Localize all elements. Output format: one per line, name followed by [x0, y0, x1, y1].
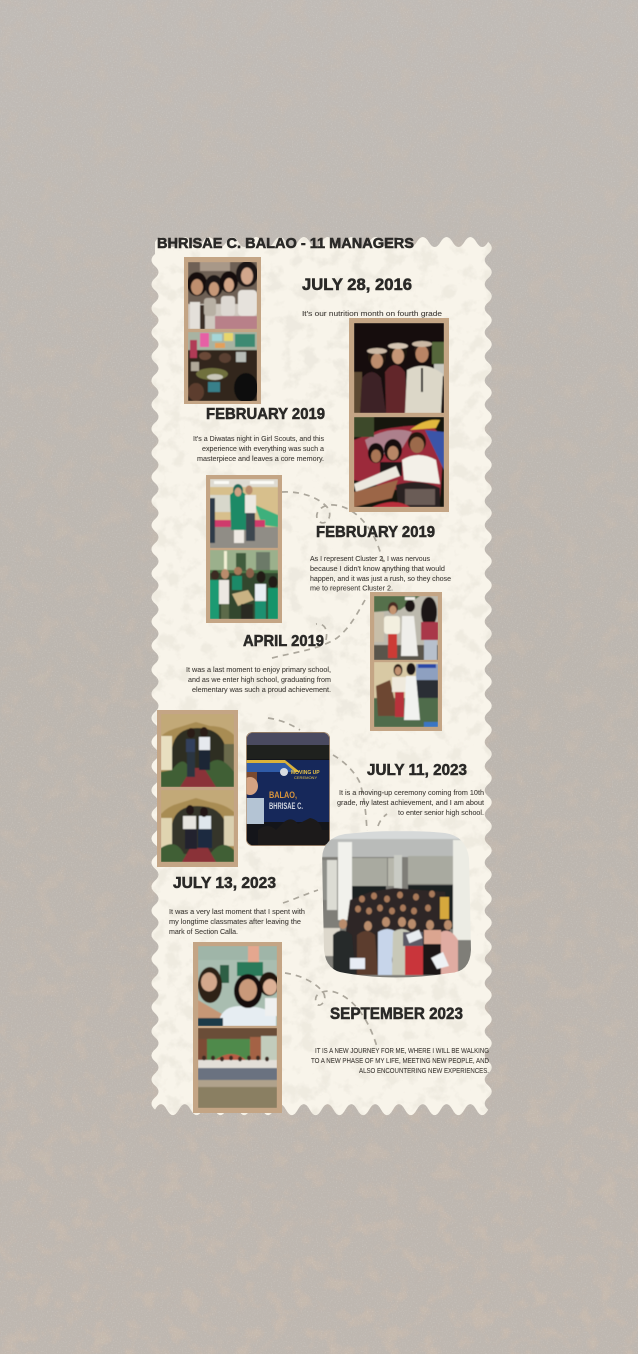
heading: April 2019: APRIL 2019 — [243, 633, 324, 650]
caption: nutrition month: It's our nutrition month on fourth grade — [302, 309, 442, 318]
caption: primary school: and as we enter high school, graduating from — [188, 675, 331, 684]
caption: Cluster 2: happen, and it was just a rush, so they chose — [310, 574, 451, 583]
photo: moving-up screen: MOVING UP — [291, 770, 320, 776]
photo frame: Girl Scouts — [206, 475, 282, 623]
scalloped paper panel — [145, 230, 495, 1125]
photo frame: Diwatas night — [349, 318, 449, 512]
caption: Diwatas night: masterpiece and leaves a core memory. — [197, 454, 324, 463]
caption: primary school — [186, 665, 331, 694]
photo frame: new journey — [193, 942, 282, 1113]
photo frame: nutrition month — [184, 257, 261, 404]
caption: Diwatas night — [193, 434, 325, 463]
caption: classmates: mark of Section Calla. — [169, 927, 238, 936]
dashed route lines — [268, 492, 387, 1047]
heading: July 11, 2023: JULY 11, 2023 — [367, 762, 467, 779]
caption: new journey — [311, 1046, 489, 1075]
caption: moving-up ceremony: grade, my latest achievement, and I am about — [337, 798, 485, 807]
photo: moving-up screen: BALAO, — [269, 790, 297, 801]
caption: classmates — [169, 907, 305, 936]
heading: February 2019 (Diwatas): FEBRUARY 2019 — [206, 406, 325, 423]
photo: moving-up screen: BHRISAE C. — [269, 801, 303, 811]
heading: September 2023: SEPTEMBER 2023 — [330, 1005, 463, 1023]
heading: February 2019 (Cluster 2): FEBRUARY 2019 — [316, 524, 435, 541]
caption: primary school: It was a last moment to enjoy primary school, — [186, 665, 331, 674]
caption: Diwatas night: It's a Diwatas night in Girl Scouts, and this — [193, 434, 324, 443]
caption: moving-up ceremony: It is a moving-up ceremony coming from 10th — [339, 788, 484, 797]
caption: new journey: IT IS A NEW JOURNEY FOR ME, WHERE I WILL BE WALKING — [315, 1046, 489, 1055]
heading: July 13, 2023: JULY 13, 2023 — [173, 875, 276, 892]
title: BHRISAE C. BALAO - 11 MANAGERS — [157, 235, 414, 252]
photo frame: floral arch — [157, 710, 238, 867]
photo frame: graduation — [370, 592, 442, 731]
caption: Cluster 2: because I didn't know anything that would — [310, 564, 445, 573]
caption: primary school: elementary was such a proud achievement. — [192, 685, 331, 694]
caption: Cluster 2 — [310, 554, 451, 592]
caption: Diwatas night: experience with everything was such a — [202, 444, 325, 453]
caption: classmates: It was a very last moment that I spent with — [169, 907, 305, 916]
caption: Cluster 2: me to represent Cluster 2. — [310, 584, 393, 592]
photo: moving-up screen: CEREMONY — [294, 775, 317, 780]
caption: moving-up ceremony — [337, 788, 485, 817]
caption: Cluster 2: As I represent Cluster 2, I was nervous — [310, 554, 430, 563]
caption: classmates: my longtime classmates after leaving the — [169, 917, 301, 926]
caption: moving-up ceremony: to enter senior high school. — [398, 808, 484, 817]
photo: moving-up screen — [242, 732, 330, 846]
caption: new journey: ALSO ENCOUNTERING NEW EXPERIENCES. — [359, 1066, 489, 1075]
photo: section group portrait — [322, 831, 472, 978]
heading: July 28, 2016: JULY 28, 2016 — [302, 275, 412, 294]
caption: new journey: TO A NEW PHASE OF MY LIFE, MEETING NEW PEOPLE, AND — [311, 1056, 489, 1065]
